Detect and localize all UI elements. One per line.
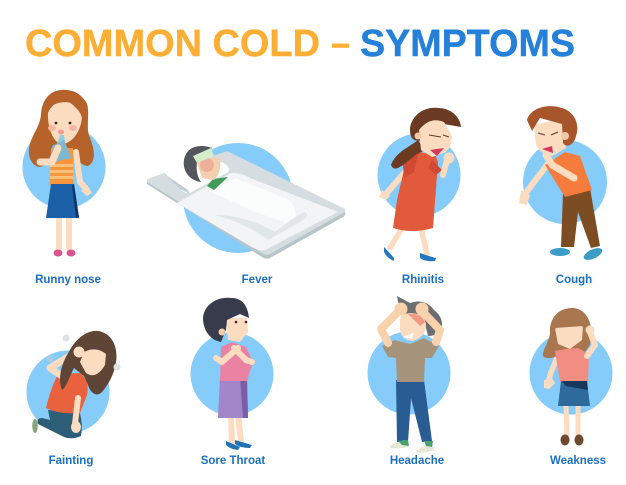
background circle bbox=[368, 332, 450, 414]
panel: fainting bbox=[26, 331, 120, 467]
background circle bbox=[523, 140, 607, 224]
figure: patient in bed bbox=[147, 146, 345, 259]
panel: headache bbox=[368, 296, 450, 467]
panel: cough bbox=[519, 106, 607, 286]
label: Fever bbox=[242, 274, 273, 286]
background circle bbox=[22, 126, 106, 208]
label: Weakness bbox=[550, 455, 606, 467]
figure: woman holding throat bbox=[203, 298, 253, 450]
figure: tired girl bbox=[543, 308, 595, 446]
figure: girl with tissue bbox=[29, 90, 94, 257]
label: Runny nose bbox=[35, 274, 101, 286]
background circle bbox=[183, 143, 293, 253]
label: Fainting bbox=[49, 455, 93, 467]
title: – bbox=[331, 23, 350, 65]
figure: kneeling girl bbox=[32, 331, 121, 438]
background circle bbox=[26, 350, 110, 434]
title: SYMPTOMS bbox=[360, 23, 575, 65]
panel: sore throat bbox=[190, 298, 274, 467]
background circle bbox=[190, 332, 274, 416]
label: Headache bbox=[390, 455, 444, 467]
label: Rhinitis bbox=[402, 274, 444, 286]
panel: runny nose bbox=[22, 90, 106, 286]
panel: weakness bbox=[530, 308, 612, 467]
title bbox=[25, 23, 575, 65]
label: Cough bbox=[556, 274, 592, 286]
panel: fever bbox=[147, 143, 345, 286]
label: Sore Throat bbox=[201, 455, 265, 467]
figure: girl sneezing bbox=[379, 108, 461, 261]
figure: man holding head bbox=[381, 296, 442, 453]
background circle bbox=[530, 332, 612, 414]
background circle bbox=[378, 134, 460, 216]
figure: boy coughing bbox=[519, 106, 604, 262]
title: COMMON COLD bbox=[25, 23, 320, 65]
panel: rhinitis bbox=[378, 108, 461, 286]
